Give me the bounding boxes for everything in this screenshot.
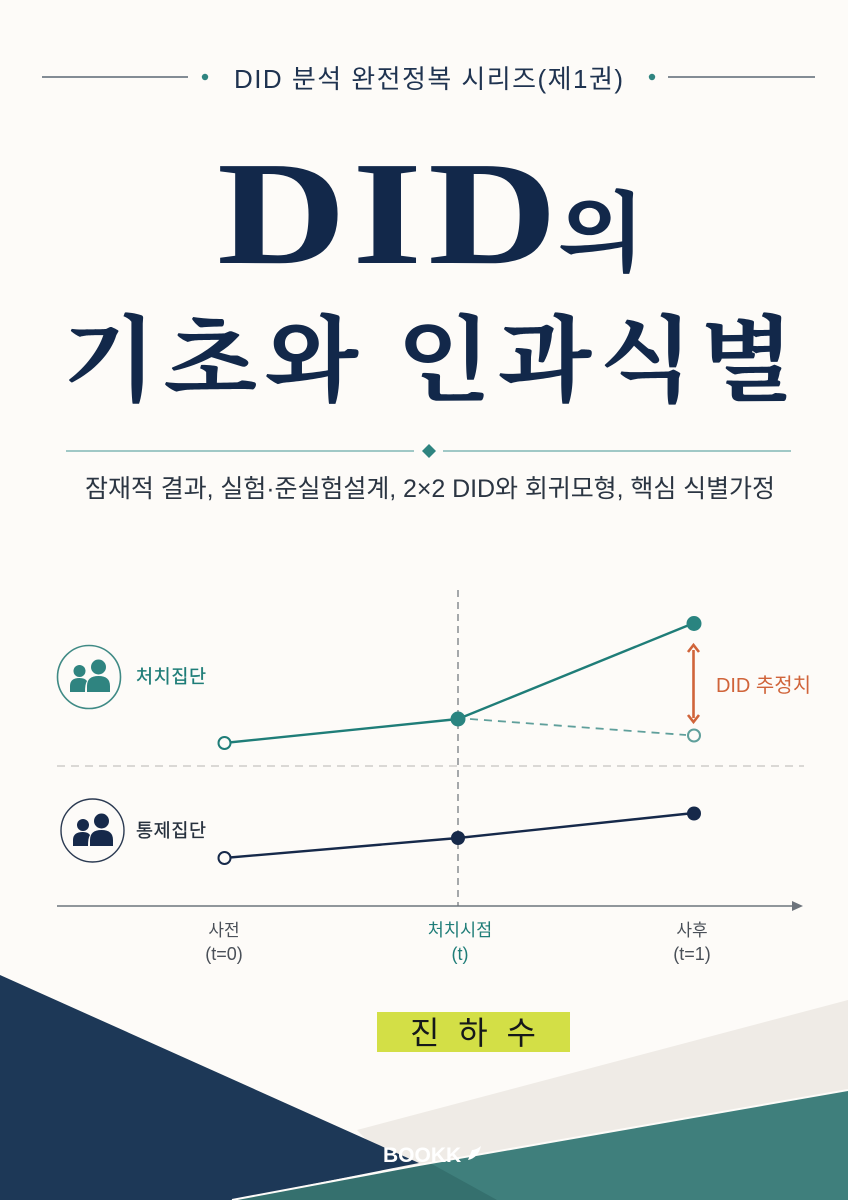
- control group line: [218, 806, 701, 864]
- title: 의: [557, 187, 645, 284]
- control group label: 통제집단: [136, 820, 206, 841]
- publisher logo: BOOKK: [383, 1144, 461, 1167]
- DID estimate label: DID 추정치: [716, 674, 811, 697]
- treated group line: [218, 616, 702, 749]
- axis label: before: 사전: [208, 921, 240, 940]
- series header: DID 분석 완전정복 시리즈(제1권): [234, 64, 623, 94]
- title: DID: [217, 131, 563, 295]
- DID estimate arrow: [688, 645, 699, 722]
- divider with diamond: [66, 444, 791, 458]
- axis label: treatment time: 처치시점: [428, 920, 492, 940]
- icon: control group: [61, 799, 124, 862]
- subtitle: 잠재적 결과, 실험·준실험설계, 2×2 DID와 회귀모형, 핵심 식별가정: [85, 475, 775, 503]
- axis label: after: (t=1): [673, 944, 711, 964]
- author plate: [377, 1012, 570, 1052]
- axis label: after: 사후: [676, 921, 708, 940]
- axis label: before: (t=0): [205, 944, 243, 964]
- axis label: treatment time: (t): [452, 944, 468, 964]
- counterfactual dashed line: [470, 719, 700, 742]
- bottom shapes: [0, 975, 848, 1200]
- title: 기초와 인과식별: [62, 310, 794, 414]
- chart: [57, 590, 811, 964]
- title: [62, 131, 794, 414]
- icon: treated group: [58, 646, 120, 708]
- treated group label: 처치집단: [136, 666, 206, 687]
- x axis arrow: [57, 901, 803, 911]
- author plate: 진 하 수: [410, 1015, 536, 1051]
- series header: [42, 64, 815, 94]
